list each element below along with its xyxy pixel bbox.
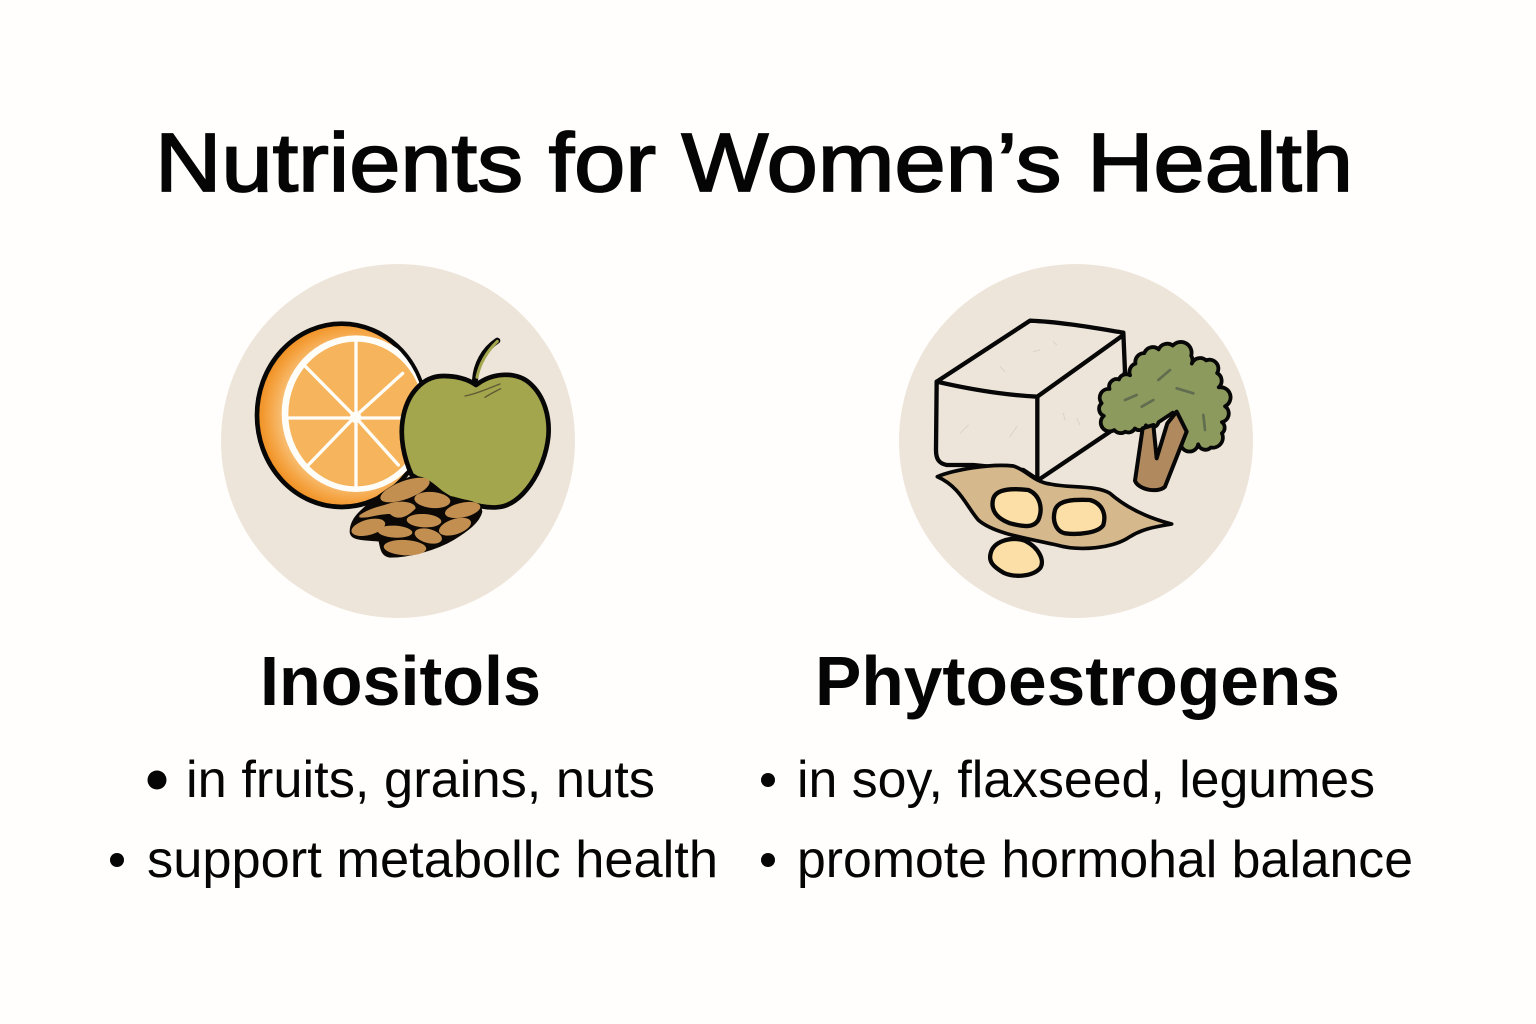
icon: broccoli [1099,342,1231,490]
icon: tofu block [936,321,1125,480]
icon: orange slice [257,324,430,507]
heading: Inositols: Inositols [260,642,541,720]
icon: nuts [350,473,482,556]
icon: soybean pod [937,465,1172,576]
bullet: promote hormohal balance: promote hormohal balance [797,831,1413,889]
bullet: support metabollc health: support metabollc health [147,831,718,889]
icon: fruits and nuts [221,264,575,618]
heading: Phytoestrogens: Phytoestrogens [815,642,1340,720]
icon: tofu, broccoli and soybeans [899,264,1253,618]
bullet: in soy, flaxseed, legumes: in soy, flaxseed, legumes [797,751,1375,809]
infographic [110,130,1411,888]
panel: phytoestrogens [761,264,1413,889]
title: Nutrients for Women’s Health [155,116,1353,209]
panel: inositols [110,264,718,889]
icon: apple [402,341,549,507]
bullet: in fruits, grains, nuts: in fruits, grains, nuts [186,751,655,809]
